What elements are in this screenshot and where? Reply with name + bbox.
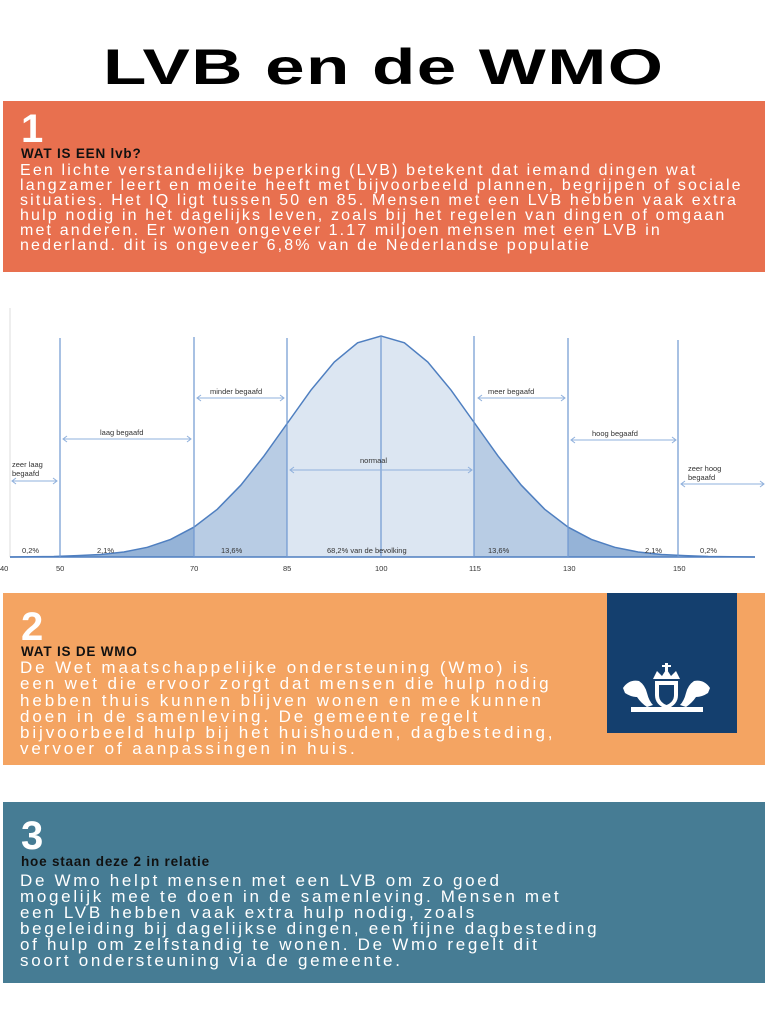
chart: IQ normal distribution: begaafd bbox=[12, 469, 39, 478]
chart: IQ normal distribution: zeer hoog bbox=[688, 464, 721, 473]
chart: IQ normal distribution: 150 bbox=[673, 564, 686, 573]
chart: IQ normal distribution: 115 bbox=[469, 564, 481, 573]
chart: IQ normal distribution: 2,1% bbox=[97, 546, 114, 555]
text block: nederland. dit is ongeveer 6,8% van de Nederlandse populatie bbox=[20, 237, 591, 254]
heading: WAT IS EEN lvb? bbox=[21, 146, 142, 161]
text block: langzamer leert en moeite heeft met bijvoorbeeld plannen, begrijpen of sociale bbox=[20, 177, 743, 194]
text block: een wet die ervoor zorgt dat mensen die hulp nodig bbox=[20, 674, 552, 693]
panel: wat is de wmo bbox=[3, 593, 765, 765]
heading: WAT IS DE WMO bbox=[21, 644, 138, 659]
text block: doen in de samenleving. De gemeente regelt bbox=[20, 707, 480, 726]
chart: IQ normal distribution: 13,6% bbox=[488, 546, 510, 555]
text block: situaties. Het IQ ligt tussen 50 en 85. Mensen met een LVB hebben vaak extra bbox=[20, 192, 738, 209]
text block bbox=[20, 871, 599, 970]
text block bbox=[20, 658, 555, 758]
chart: IQ normal distribution: 50 bbox=[56, 564, 64, 573]
chart: IQ normal distribution: 0,2% bbox=[22, 546, 39, 555]
text block: hulp nodig in het dagelijks leven, zoals bij het regelen van dingen of omgaan bbox=[20, 207, 726, 224]
text block: een LVB hebben vaak extra hulp nodig, zoals bbox=[20, 903, 477, 922]
chart: IQ normal distribution: 40 bbox=[0, 564, 8, 573]
chart: IQ normal distribution: minder begaafd bbox=[210, 387, 262, 396]
number 1: 1 bbox=[21, 107, 43, 151]
text block: bijvoorbeeld hulp bij het huishouden, dagbesteding, bbox=[20, 723, 555, 742]
chart: IQ normal distribution: 70 bbox=[190, 564, 198, 573]
chart: IQ normal distribution bbox=[0, 308, 765, 573]
chart: IQ normal distribution: 100 bbox=[375, 564, 388, 573]
chart: IQ normal distribution: 13,6% bbox=[221, 546, 243, 555]
title: LVB en de WMO bbox=[103, 39, 665, 95]
panel: relatie bbox=[3, 802, 765, 983]
chart: IQ normal distribution: laag begaafd bbox=[100, 428, 143, 437]
text block: of hulp om zelfstandig te wonen. De Wmo regelt dit bbox=[20, 935, 540, 954]
chart: IQ normal distribution: begaafd bbox=[688, 473, 715, 482]
text block: vervoer of aanpassingen in huis. bbox=[20, 739, 358, 758]
chart: IQ normal distribution: 68,2% van de bevolking bbox=[327, 546, 407, 555]
panel: wat is een lvb bbox=[3, 101, 765, 272]
chart: IQ normal distribution: normaal bbox=[360, 456, 387, 465]
number 3: 3 bbox=[21, 814, 43, 858]
text block bbox=[20, 162, 743, 254]
chart: IQ normal distribution: 0,2% bbox=[700, 546, 717, 555]
icon: rijksoverheid logo bbox=[607, 593, 737, 733]
chart: IQ normal distribution: zeer laag bbox=[12, 460, 43, 469]
text block: soort ondersteuning via de gemeente. bbox=[20, 951, 403, 970]
text block: hebben thuis kunnen blijven wonen en mee kunnen bbox=[20, 691, 544, 710]
chart: IQ normal distribution: hoog begaafd bbox=[592, 429, 638, 438]
chart: IQ normal distribution: 85 bbox=[283, 564, 291, 573]
text block: mogelijk mee te doen in de samenleving. Mensen met bbox=[20, 887, 561, 906]
text block: begeleiding bij dagelijkse dingen, een fijne dagbesteding bbox=[20, 919, 599, 938]
heading: hoe staan deze 2 in relatie bbox=[21, 854, 210, 869]
text block: Een lichte verstandelijke beperking (LVB) betekent dat iemand dingen wat bbox=[20, 162, 698, 179]
text block: met anderen. Er wonen ongeveer 1.17 miljoen mensen met een LVB in bbox=[20, 222, 662, 239]
text block: De Wmo helpt mensen met een LVB om zo goed bbox=[20, 871, 502, 890]
chart: IQ normal distribution: 130 bbox=[563, 564, 576, 573]
chart: IQ normal distribution: meer begaafd bbox=[488, 387, 534, 396]
chart: IQ normal distribution: 2,1% bbox=[645, 546, 662, 555]
number 2: 2 bbox=[21, 605, 43, 649]
text block: De Wet maatschappelijke ondersteuning (Wmo) is bbox=[20, 658, 531, 677]
